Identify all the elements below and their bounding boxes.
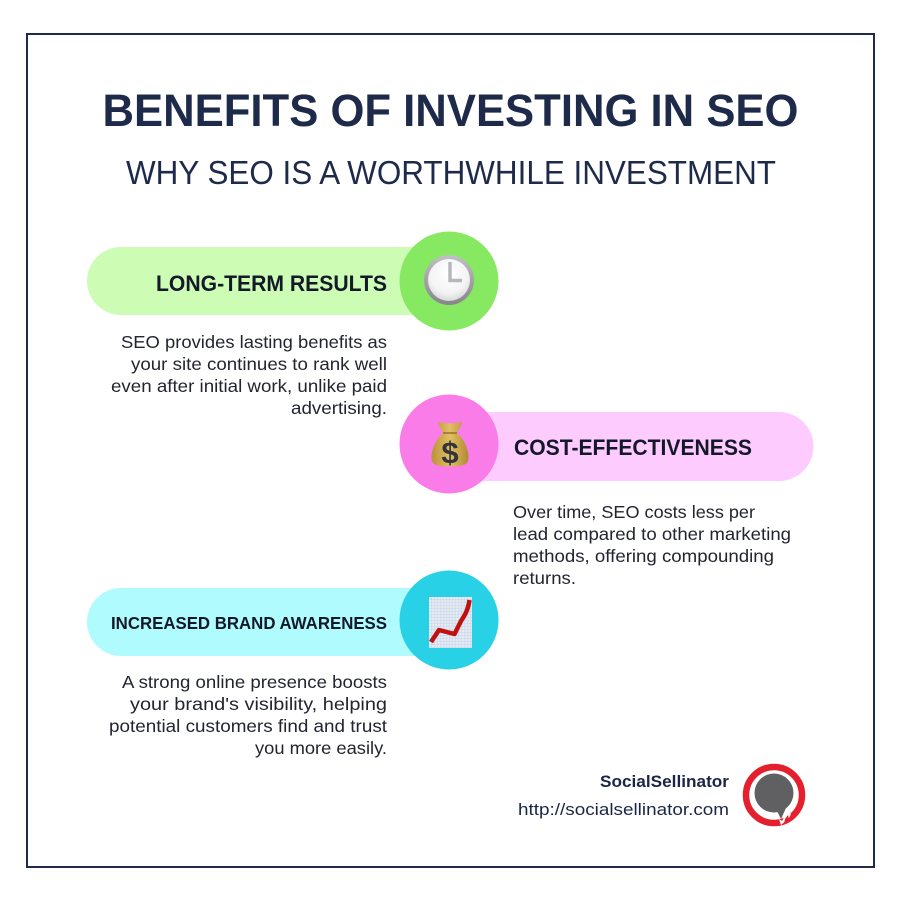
cyan circle <box>400 570 498 670</box>
heading: increased brand awareness: INCREASED BRAND AWARENESS <box>111 613 387 633</box>
panel: long-term results <box>87 232 499 418</box>
title: BENEFITS OF INVESTING IN SEO <box>102 85 798 136</box>
green pill <box>87 247 440 315</box>
text: cost-effectiveness description <box>513 502 791 588</box>
text: long-term results description: even after initial work, unlike paid <box>111 376 387 396</box>
heading: cost-effectiveness: COST-EFFECTIVENESS <box>514 435 752 460</box>
text: long-term results description: your site continues to rank well <box>131 354 387 374</box>
brand name: SocialSellinator <box>600 772 729 791</box>
text: cost-effectiveness description: lead compared to other marketing <box>513 524 791 544</box>
text: long-term results description: advertising. <box>291 398 387 418</box>
pink pill <box>460 412 814 481</box>
subtitle: WHY SEO IS A WORTHWHILE INVESTMENT <box>126 154 776 191</box>
icon: clock <box>424 255 474 305</box>
panel: increased brand awareness <box>87 570 498 758</box>
text: cost-effectiveness description: methods, offering compounding <box>513 546 774 566</box>
panel: cost-effectiveness <box>400 394 814 588</box>
heading: long-term results: LONG-TERM RESULTS <box>156 271 387 296</box>
brand url: http://socialsellinator.com <box>518 800 729 819</box>
icon: chart <box>429 597 472 648</box>
text: brand awareness description: your brand's visibility, helping <box>130 694 387 714</box>
cyan pill <box>87 588 440 656</box>
text: brand awareness description <box>109 672 387 758</box>
text: cost-effectiveness description: returns. <box>513 568 576 588</box>
text: brand awareness description: A strong online presence boosts <box>122 672 387 692</box>
green circle <box>400 232 498 330</box>
text: brand awareness description: you more easily. <box>255 738 387 758</box>
text: cost-effectiveness description: Over time, SEO costs less per <box>513 502 755 522</box>
icon: money bag: $ <box>441 435 459 470</box>
text: brand awareness description: potential customers find and trust <box>109 716 387 736</box>
text: long-term results description <box>111 332 387 418</box>
footer brand <box>518 767 802 825</box>
pink circle <box>400 394 498 494</box>
icon: money bag <box>431 422 469 470</box>
text: long-term results description: SEO provides lasting benefits as <box>121 332 387 352</box>
logo <box>746 767 802 825</box>
